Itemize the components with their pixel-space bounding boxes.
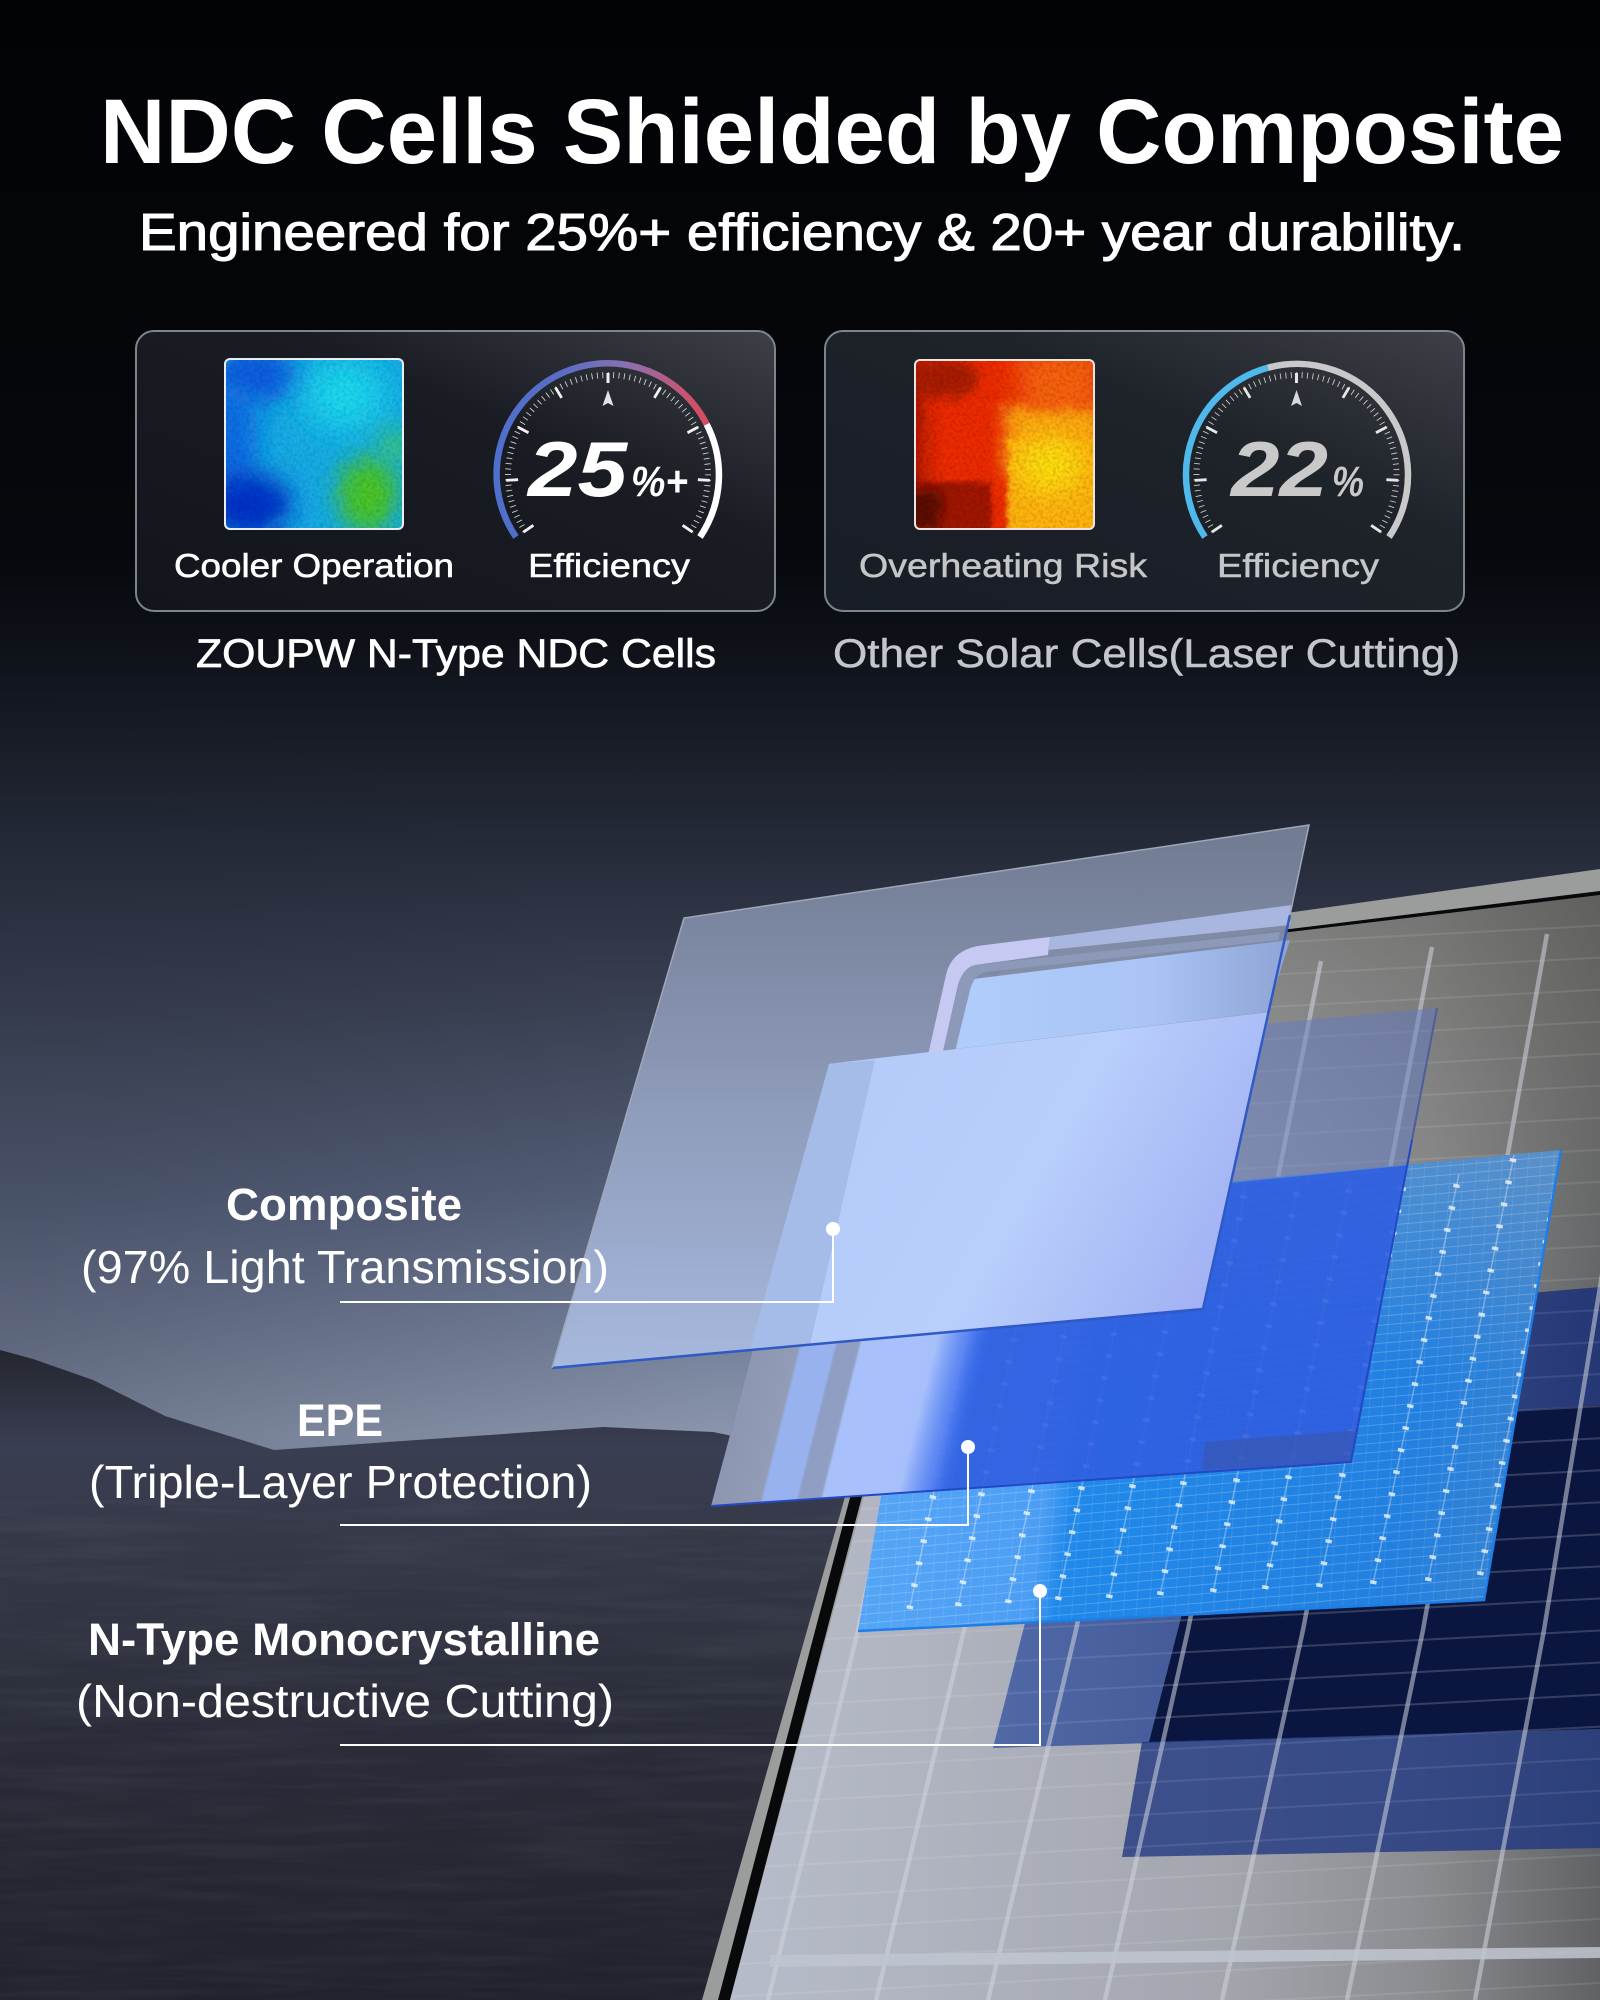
panel vertical cell dividers — [768, 920, 1600, 2000]
label: cooler operation: Cooler Operation — [174, 547, 454, 584]
lower shadow — [1122, 1729, 1600, 1857]
grey frame strip — [940, 932, 1280, 1064]
composite bright inner region — [750, 1012, 1270, 1350]
cell horizontal lines — [998, 924, 1600, 2000]
gauge value 25: 25 — [526, 425, 629, 513]
layer: composite sheet — [552, 825, 1309, 1368]
lilac top frame strip — [1048, 905, 1292, 950]
label: overheating risk: Overheating Risk — [859, 547, 1148, 584]
gauge: 25%+ efficiency — [497, 363, 719, 537]
callout heading: N-Type Monocrystalline — [88, 1614, 600, 1665]
thermal image: hot red map — [914, 359, 1095, 530]
gauge pointer — [1291, 390, 1302, 406]
subheading: Engineered for 25%+ efficiency & 20+ year durability. — [139, 204, 1465, 262]
gauge minor ticks — [1196, 375, 1397, 531]
EPE left light reflection — [711, 1330, 982, 1505]
panel: ZOUPW N-Type NDC cells comparison card — [136, 331, 775, 611]
thermal image: cool blue map — [224, 358, 404, 530]
gauge value 22: 22 — [1229, 425, 1328, 513]
leader dot — [1033, 1584, 1047, 1598]
callout heading: Composite — [226, 1179, 462, 1230]
heading: NDC Cells Shielded by Composite — [100, 81, 1564, 183]
navy cell lines — [1149, 1405, 1600, 1742]
EPE corner shadow — [1202, 1430, 1362, 1470]
cell sheet top fade — [858, 1150, 1561, 1631]
gauge: 22% efficiency — [1186, 364, 1408, 537]
gauge pointer — [602, 390, 614, 406]
gauge major ticks — [506, 373, 710, 532]
callout: N-type monocrystalline — [76, 1584, 1047, 1745]
panel glass surface — [700, 880, 1600, 2000]
gauge minor ticks — [508, 375, 708, 531]
composite translucent surface — [552, 825, 1309, 1368]
upper lit region — [829, 940, 1290, 1064]
callout detail: (Triple-Layer Protection) — [89, 1456, 592, 1508]
composite bright inner darker edge band — [750, 1060, 875, 1350]
background: dark sand dunes — [0, 1350, 900, 2000]
EPE blue region — [711, 1166, 1406, 1505]
glass top shading — [1236, 895, 1599, 1172]
thermal speckle — [225, 359, 403, 529]
layer: N-type monocrystalline cell sheet — [858, 1150, 1564, 1631]
EPE upper right edge — [1412, 1008, 1437, 1140]
callout detail: (Non-destructive Cutting) — [76, 1675, 614, 1727]
panel frame — [702, 869, 1600, 2000]
cell sheet surface — [858, 1150, 1561, 1631]
callout heading: EPE — [297, 1395, 383, 1446]
gauge unit %+: %+ — [631, 458, 688, 506]
EPE lower edge — [711, 1140, 1412, 1506]
gauge arc blue — [1186, 368, 1268, 537]
gauge arc white end — [700, 424, 719, 537]
panel frame seen through composite — [829, 905, 1292, 1064]
shadow of composite layer — [993, 1287, 1600, 1748]
lilac frame corner — [926, 937, 1050, 1064]
card background — [136, 331, 775, 611]
leader dot — [826, 1222, 840, 1236]
composite top and left light edge — [552, 825, 1309, 1368]
thermal speckle — [915, 360, 1094, 529]
leader line — [340, 1229, 833, 1302]
leader dot — [961, 1440, 975, 1454]
label: efficiency: Efficiency — [1217, 547, 1380, 584]
panel: other solar cells comparison card — [825, 331, 1464, 611]
cell fine grid — [858, 1150, 1561, 1631]
card background — [825, 331, 1464, 611]
EPE saturated tone over cells — [711, 1166, 1406, 1505]
gauge unit %: % — [1332, 458, 1364, 506]
caption: ZOUPW cells: ZOUPW N-Type NDC Cells — [196, 632, 716, 676]
composite lower blue edge — [552, 915, 1290, 1368]
gauge arc coloured — [497, 363, 707, 537]
glass base tone — [700, 880, 1600, 2000]
cell sheet edge — [858, 1150, 1561, 1631]
label: efficiency: Efficiency — [528, 547, 691, 584]
EPE translucent base — [711, 1008, 1437, 1506]
gauge arc grey — [1268, 364, 1408, 537]
panel frame black edge — [718, 891, 1600, 2000]
gauge major ticks — [1195, 373, 1398, 532]
cell busbars — [910, 1150, 1564, 1609]
callout: composite — [81, 1179, 840, 1302]
background: sky left shading — [0, 630, 720, 1500]
leader line — [340, 1447, 968, 1525]
caption: other cells: Other Solar Cells(Laser Cutting) — [833, 632, 1460, 676]
dark navy cell area — [1149, 1405, 1600, 1742]
solar panel — [700, 869, 1600, 2000]
callout detail: (97% Light Transmission) — [81, 1241, 609, 1293]
leader line — [340, 1591, 1040, 1745]
callout: EPE — [89, 1395, 975, 1525]
layer: EPE sheet — [710, 1008, 1438, 1507]
panel bottom horizontal bar — [770, 1947, 1600, 1967]
